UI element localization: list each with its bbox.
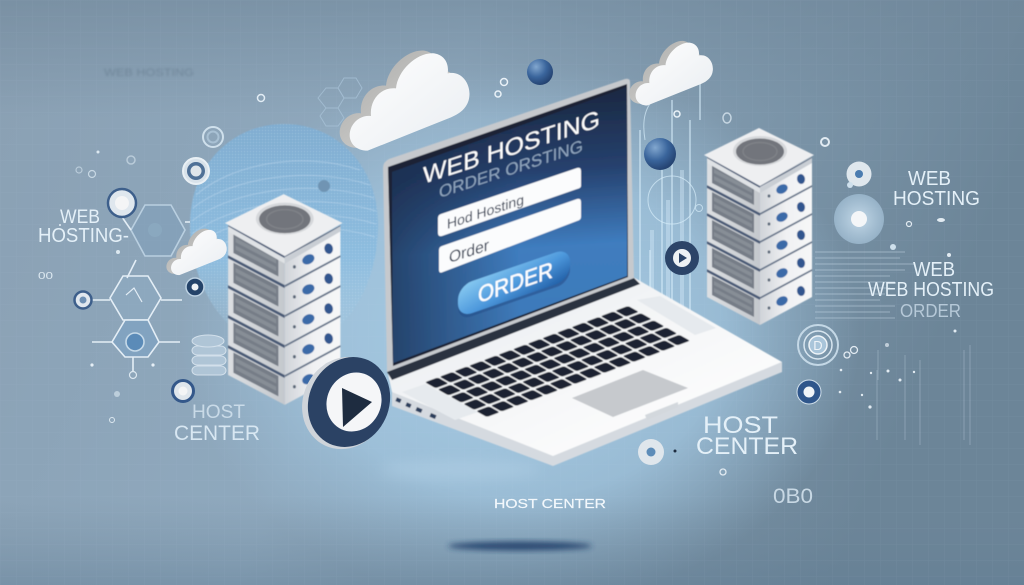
hex cluster top	[318, 78, 362, 126]
faint vertical lines right bottom	[877, 345, 970, 445]
sphere right	[644, 138, 676, 170]
order button	[458, 247, 570, 321]
laptop	[383, 79, 782, 466]
disc bottom	[638, 439, 726, 475]
small floating rings	[495, 78, 731, 123]
label: web hosting right: HOSTING	[893, 188, 980, 210]
input field: order: Order	[449, 236, 490, 267]
cloud small left	[166, 229, 227, 275]
network nodes and dots left	[59, 94, 264, 422]
laptop base	[388, 277, 782, 466]
label: web hosting right	[893, 168, 980, 210]
particles right	[839, 330, 956, 409]
front latch	[645, 402, 678, 420]
label: host center left: HOST	[192, 402, 245, 423]
screen title: WEB HOSTING	[423, 106, 600, 190]
right floating discs	[821, 138, 951, 257]
cloud top right	[629, 41, 713, 105]
label: web hosting left	[38, 207, 129, 247]
label: web hosting right: WEB	[908, 168, 951, 190]
label: host center middle right: HOST	[703, 412, 778, 439]
label: host center left	[174, 402, 260, 445]
laptop shadow	[380, 460, 540, 480]
server rack right	[704, 128, 814, 325]
label: web hosting order right: ORDER	[900, 301, 961, 321]
label: web hosting left: WEB	[60, 207, 100, 228]
label: host center bottom: HOST CENTER	[494, 496, 606, 511]
number label left: 00	[38, 271, 54, 282]
label: host center middle right	[696, 412, 798, 460]
sphere top	[527, 59, 553, 85]
mesh globe	[190, 124, 378, 330]
small play icon	[665, 241, 699, 275]
label: web hosting order right: WEB HOSTING	[868, 279, 994, 301]
input field: hosting	[438, 168, 581, 236]
label: host center left: CENTER	[174, 422, 260, 445]
input field: order	[439, 199, 581, 273]
connection lines behind laptop	[640, 60, 702, 320]
floor shadow	[448, 542, 592, 550]
target icon: D	[813, 338, 823, 353]
network hexagons	[92, 205, 190, 372]
navy ring icon	[797, 380, 821, 404]
server rack left	[225, 194, 343, 405]
data stripes right	[815, 252, 915, 318]
cloud top centre	[340, 51, 470, 151]
target icon	[798, 325, 858, 365]
laptop screen	[383, 79, 640, 380]
trackpad	[572, 370, 688, 417]
label: web hosting order right	[868, 259, 994, 321]
label: host center middle right: CENTER	[696, 433, 798, 460]
side ports	[395, 397, 437, 419]
screen subtitle: ORDER ORSTING	[439, 136, 583, 202]
label: web hosting order right: WEB	[913, 259, 955, 281]
label: web hosting left: HOSTING-	[38, 225, 129, 247]
label: 0B0: 0B0	[773, 485, 813, 508]
order button: ORDER	[478, 258, 553, 309]
large play button	[287, 343, 405, 463]
blurred top-left caption: WEB HOSTING	[104, 67, 194, 79]
database icon	[192, 335, 226, 375]
speaker strips	[402, 384, 478, 420]
keyboard	[423, 305, 692, 418]
input field: hosting: Hod Hosting	[447, 192, 524, 233]
